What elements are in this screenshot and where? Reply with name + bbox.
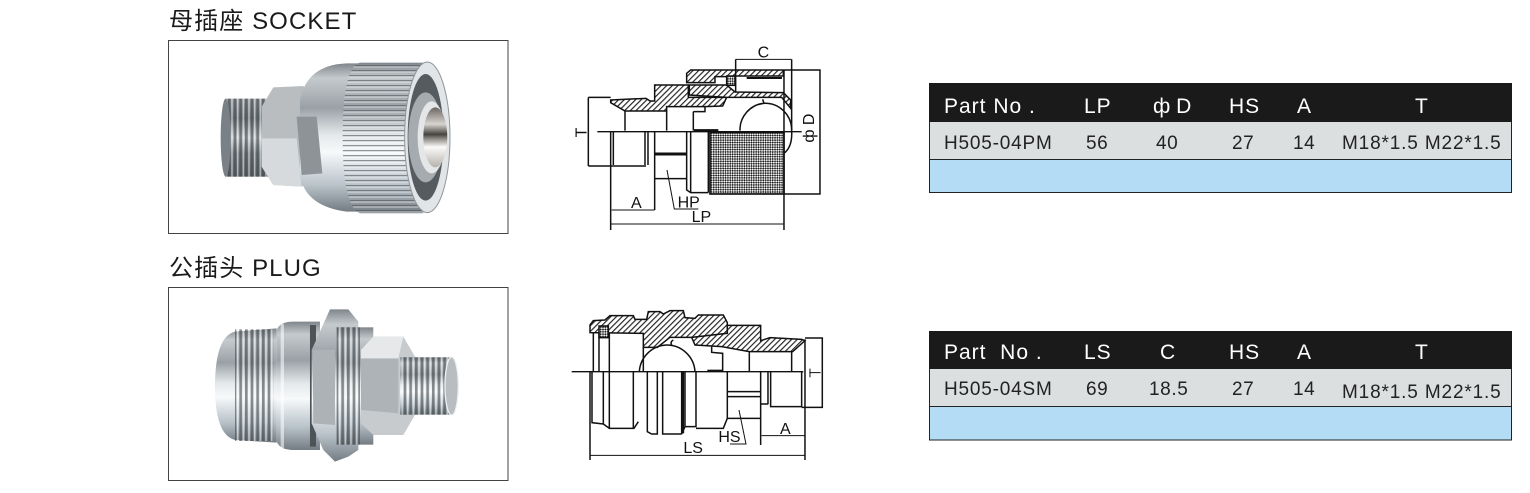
table: socket specifications: 27 <box>1232 133 1254 154</box>
table: plug specifications: M18*1.5 M22*1.5 <box>1342 382 1502 403</box>
table: socket specifications: T <box>1415 95 1428 118</box>
table: plug specifications: H505-04SM <box>944 379 1053 400</box>
technical drawing: socket section: T <box>574 127 591 137</box>
table: plug specifications: 14 <box>1293 379 1315 400</box>
table: socket specifications: 56 <box>1086 133 1108 154</box>
table: socket specifications: M18*1.5 M22*1.5 <box>1342 133 1502 154</box>
heading: socket: 母插座 SOCKET <box>169 8 357 35</box>
table: socket specifications: Part No . <box>944 95 1036 118</box>
technical drawing: plug section: LS <box>683 440 703 457</box>
technical drawing: plug section <box>572 311 822 460</box>
table: socket specifications: A <box>1297 95 1311 118</box>
table: socket specifications: ф D <box>1153 95 1191 118</box>
table: plug specifications: C <box>1160 341 1175 364</box>
technical drawing: socket section: ф D <box>801 114 818 143</box>
technical drawing: socket section: LP <box>692 209 711 226</box>
table: plug specifications: T <box>1415 341 1428 364</box>
panel: plug photo <box>168 288 508 480</box>
technical drawing: socket section: C <box>758 45 769 62</box>
technical drawing: socket section <box>574 45 821 230</box>
table: plug specifications: A <box>1297 341 1311 364</box>
panel: socket photo <box>168 40 508 234</box>
table: socket specifications: H505-04PM <box>944 133 1053 154</box>
table: plug specifications: 27 <box>1232 379 1254 400</box>
table: socket specifications: LP <box>1084 95 1112 118</box>
table: plug specifications <box>929 331 1512 440</box>
technical drawing: socket section: A <box>631 195 642 212</box>
table: socket specifications: HS <box>1229 95 1260 118</box>
table: socket specifications: 40 <box>1156 133 1178 154</box>
table: socket specifications <box>929 83 1512 192</box>
technical drawing: socket section: HP <box>678 194 700 211</box>
heading: plug: 公插头 PLUG <box>169 255 322 282</box>
table: plug specifications: LS <box>1084 341 1112 364</box>
technical drawing: plug section: HS <box>718 429 741 446</box>
table: plug specifications: 69 <box>1086 379 1108 400</box>
table: plug specifications: 18.5 <box>1149 379 1188 400</box>
technical drawing: plug section: A <box>780 421 791 438</box>
table: plug specifications: HS <box>1229 341 1260 364</box>
table: plug specifications: Part No . <box>944 341 1043 364</box>
table: socket specifications: 14 <box>1293 133 1315 154</box>
